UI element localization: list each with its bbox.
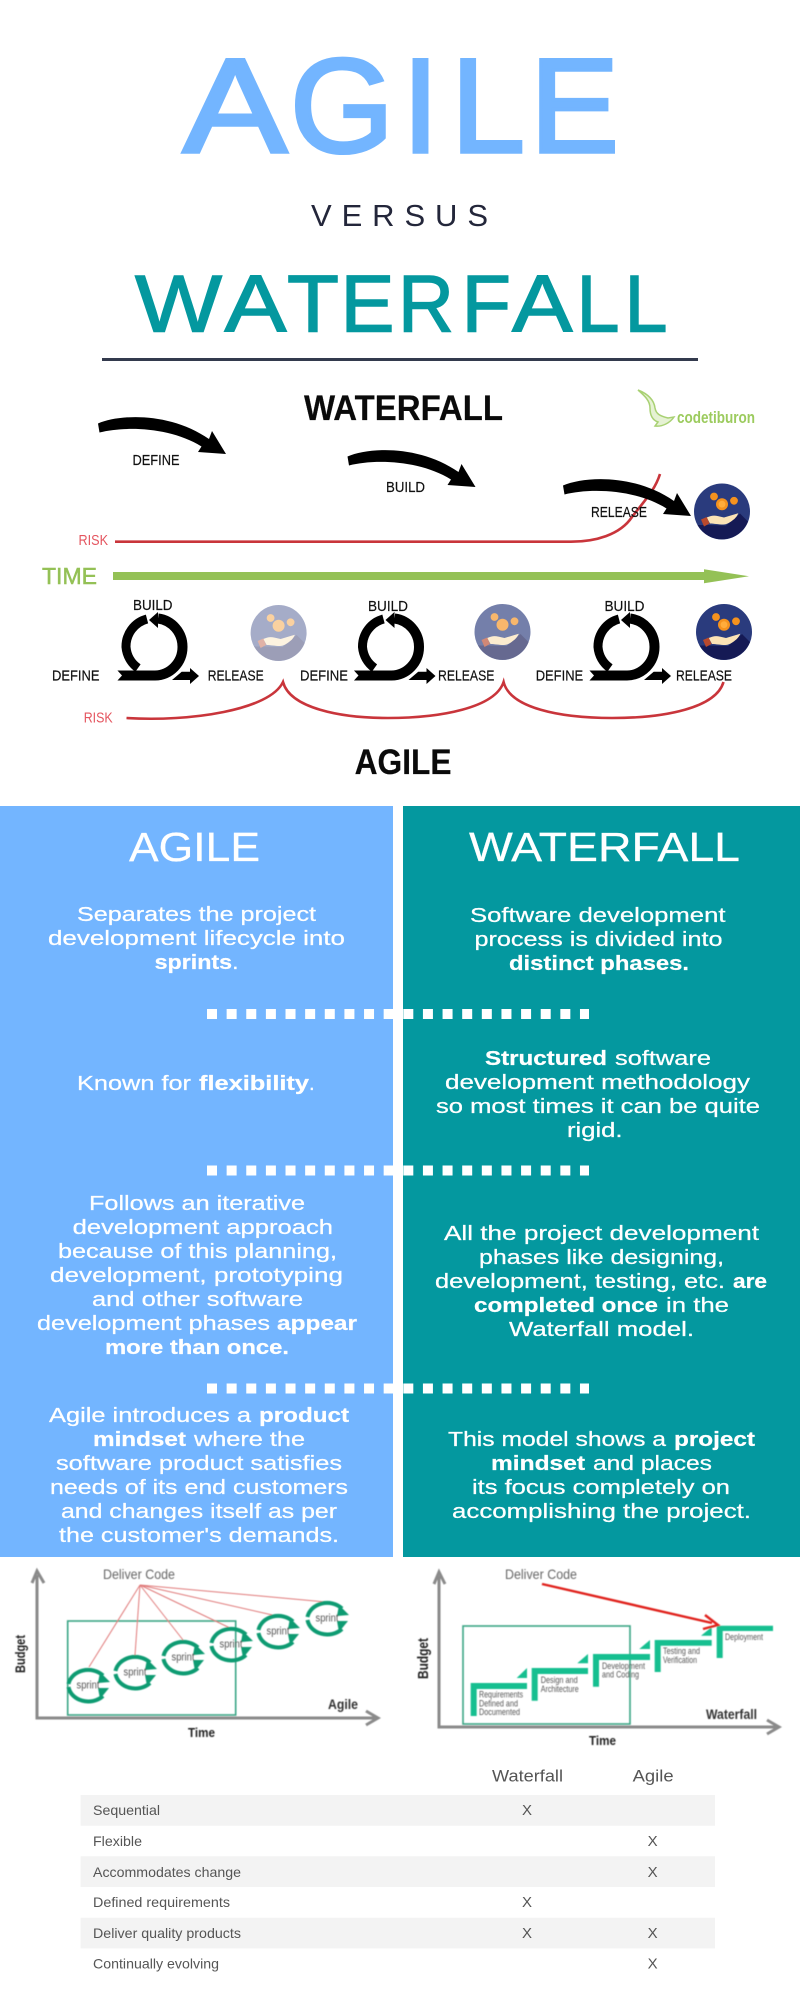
panel: agile column <box>0 806 393 1557</box>
heading: VERSUS: VERSUS <box>311 198 488 233</box>
text: completed once: All the project development <box>444 1222 759 1245</box>
text: flexibility: . <box>309 1072 315 1095</box>
label: deliver code: Deliver Code <box>103 1566 175 1582</box>
dotted divider rows <box>207 1014 589 1388</box>
sprint 1: sprint <box>76 1680 100 1692</box>
row: accommodates change: Accommodates change <box>93 1864 241 1880</box>
heading: WATERFALL: L <box>576 260 620 350</box>
text: iterative approach: appear <box>277 1312 357 1335</box>
sprint 3: sprint <box>172 1652 194 1664</box>
text: sprints: sprints . <box>155 951 239 974</box>
text: project mindset: This model shows a <box>448 1428 667 1451</box>
text: flexibility <box>77 1072 315 1095</box>
row: deliver quality products: Deliver quality products <box>93 1925 241 1941</box>
sprint 5: sprint <box>266 1626 290 1638</box>
text: product mindset <box>49 1404 349 1547</box>
text: product mindset: product <box>259 1404 349 1427</box>
label: build: BUILD <box>133 597 173 614</box>
chart label: waterfall: Waterfall <box>706 1707 757 1722</box>
risk curve: waterfall: RISK <box>78 532 108 549</box>
icon: hand with coins <box>696 604 752 660</box>
row: continually evolving: Continually evolving <box>93 1956 219 1972</box>
text: product mindset: and changes itself as per <box>61 1500 337 1523</box>
label: build: BUILD <box>368 598 408 615</box>
step labels: Requirements <box>479 1690 523 1701</box>
arrow: time: TIME <box>42 563 97 589</box>
agile cycle 2 <box>300 598 530 685</box>
title: AGILE versus WATERFALL <box>102 32 698 361</box>
sprint 3 <box>164 1642 205 1673</box>
text: structured methodology: so most times it can be quite <box>436 1095 760 1118</box>
step labels: Architecture <box>541 1684 579 1695</box>
text: sprints: Separates the project <box>77 903 316 926</box>
step labels: Documented <box>479 1707 520 1718</box>
table header <box>492 1767 674 1786</box>
panel heading: WATERFALL: WATERFALL <box>469 824 740 870</box>
text: completed once: Waterfall model. <box>509 1318 694 1341</box>
row: continually evolving <box>93 1956 658 1973</box>
chart label: agile: Agile <box>328 1697 358 1712</box>
risk curve: agile <box>84 682 723 727</box>
text: structured methodology: software <box>615 1047 711 1070</box>
text: product mindset: Agile introduces a <box>49 1404 252 1427</box>
sprint 1 <box>68 1670 110 1701</box>
axes <box>32 1571 378 1725</box>
text: product mindset: software product satisfies <box>56 1452 342 1475</box>
heading: WATERFALL: T <box>287 260 339 350</box>
row: continually evolving: X <box>648 1956 658 1973</box>
axis label: budget: Budget <box>12 1635 28 1673</box>
heading: WATERFALL: F <box>462 260 511 350</box>
step labels: Verification <box>663 1655 697 1666</box>
row: flexible: Flexible <box>93 1833 142 1849</box>
row: sequential: Sequential <box>93 1802 160 1818</box>
panel: waterfall column <box>403 806 800 1557</box>
text: distinct phases: process is divided into <box>474 928 722 951</box>
table header: Agile <box>633 1767 674 1786</box>
panel heading: AGILE: AGILE <box>129 824 260 870</box>
text: project mindset: its focus completely on <box>472 1476 730 1499</box>
icon: sprint loop <box>589 612 671 684</box>
row: defined requirements: Defined requirements <box>93 1894 230 1910</box>
text: completed once: are <box>733 1270 767 1293</box>
icon: sprint loop <box>354 612 436 684</box>
label: release: RELEASE <box>208 668 264 685</box>
heading: AGILE: G <box>290 32 394 181</box>
text: iterative approach: Follows an iterative <box>89 1192 305 1215</box>
row: deliver quality products <box>81 1918 715 1948</box>
sprint 5 <box>258 1616 300 1647</box>
arrow: define <box>98 417 226 454</box>
row: accommodates change: X <box>648 1864 658 1881</box>
text: completed once: in the <box>666 1294 729 1317</box>
row: deliver quality products: X <box>648 1925 658 1942</box>
heading: AGILE: L <box>451 32 525 181</box>
label: define: DEFINE <box>300 668 348 685</box>
sprint 2: sprint <box>124 1666 146 1678</box>
label: release: RELEASE <box>438 668 494 685</box>
diagram: waterfall versus agile timeline <box>42 389 755 782</box>
text: distinct phases: Software development <box>470 904 726 927</box>
label: deliver code: Deliver Code <box>505 1566 577 1582</box>
sprint 6: sprint <box>316 1612 338 1624</box>
text: completed once: development, testing, etc. <box>435 1270 725 1293</box>
axes <box>434 1572 779 1734</box>
text: iterative approach: more than once. <box>105 1336 289 1359</box>
text: iterative approach: and other software <box>92 1288 303 1311</box>
text: iterative approach <box>37 1192 357 1359</box>
label: define: DEFINE <box>132 452 180 469</box>
row: defined requirements: X <box>522 1894 532 1911</box>
heading: WATERFALL: E <box>340 260 394 350</box>
text: sprints <box>48 903 345 974</box>
label: build: BUILD <box>604 598 645 615</box>
chart: agile budget over time <box>12 1566 378 1740</box>
axis label: budget: Budget <box>416 1638 432 1679</box>
icon: hand with coins, faded <box>251 605 307 661</box>
axis label: time: Time <box>589 1733 616 1748</box>
text: flexibility: flexibility <box>199 1072 310 1095</box>
icon: hand with coins, semi-faded <box>474 604 530 660</box>
text: structured methodology: development methodology <box>445 1071 751 1094</box>
row: flexible <box>93 1833 658 1850</box>
label: build: BUILD <box>386 479 425 496</box>
text: iterative approach: development, prototyping <box>50 1264 343 1287</box>
text: product mindset: mindset <box>93 1428 186 1451</box>
heading: WATERFALL: W <box>135 260 223 350</box>
heading: WATERFALL <box>135 260 668 350</box>
text: completed once: phases like designing, <box>479 1246 724 1269</box>
text: completed once: completed once <box>474 1294 658 1317</box>
risk curve: agile: RISK <box>84 710 113 727</box>
label: release: RELEASE <box>676 668 732 685</box>
table header: Waterfall <box>492 1767 563 1786</box>
label: define: DEFINE <box>536 668 583 685</box>
row: accommodates change <box>81 1856 715 1887</box>
arrow: time <box>42 563 749 589</box>
arrow: release <box>563 479 691 516</box>
text: structured methodology <box>436 1047 760 1142</box>
text: product mindset: needs of its end customers <box>50 1476 348 1499</box>
step labels <box>479 1632 763 1718</box>
heading: AGILE: I <box>402 32 439 181</box>
row: sequential: X <box>522 1802 532 1819</box>
text: structured methodology: Structured <box>485 1047 607 1070</box>
step labels: Development <box>602 1661 645 1672</box>
sprint 6 <box>308 1603 349 1634</box>
icon: hand with coins (waterfall release) <box>694 484 750 540</box>
sprint 2 <box>116 1657 157 1688</box>
table: comparison <box>81 1767 715 1973</box>
step labels: Testing and <box>663 1646 700 1657</box>
heading: AGILE <box>183 32 619 181</box>
text: iterative approach: development approach <box>73 1216 333 1239</box>
text: project mindset: mindset <box>491 1452 585 1475</box>
title rule <box>102 358 698 361</box>
budget box <box>463 1626 630 1724</box>
text: project mindset <box>448 1428 755 1523</box>
axis label: time: Time <box>188 1725 215 1740</box>
text: structured methodology: rigid. <box>567 1119 622 1142</box>
label: release: RELEASE <box>591 504 647 521</box>
heading: AGILE: A <box>183 32 288 181</box>
diagram heading: WATERFALL: WATERFALL <box>304 389 503 428</box>
text: distinct phases <box>470 904 726 975</box>
heading: WATERFALL: L <box>624 260 668 350</box>
chart: waterfall budget over time <box>416 1566 779 1748</box>
steps <box>471 1626 773 1716</box>
deliver lines <box>89 1585 326 1667</box>
text: completed once <box>435 1222 767 1341</box>
heading: AGILE: E <box>530 32 619 181</box>
row: deliver quality products: X <box>522 1925 532 1942</box>
risk curve: waterfall <box>78 474 660 549</box>
logo: codetiburon <box>638 390 755 427</box>
heading: WATERFALL: A <box>512 260 572 350</box>
text: product mindset: the customer's demands. <box>59 1524 339 1547</box>
arrow: build <box>348 450 476 487</box>
diagram heading: AGILE: AGILE <box>355 743 452 782</box>
sprint 4 <box>212 1629 253 1660</box>
sprint 4: sprint <box>220 1638 242 1650</box>
agile cycle 3 <box>536 598 752 685</box>
text: distinct phases: distinct phases. <box>509 952 689 975</box>
step labels: Defined and <box>479 1699 518 1710</box>
logo: codetiburon: codetiburon <box>677 408 755 427</box>
text: sprints: development lifecycle into <box>48 927 345 950</box>
step labels: Design and <box>541 1675 578 1686</box>
text: iterative approach: development phases <box>37 1312 270 1335</box>
text: project mindset: and places <box>593 1452 712 1475</box>
icon: sprint loop <box>117 612 199 684</box>
text: iterative approach: because of this planning, <box>58 1240 337 1263</box>
budget box <box>68 1621 236 1715</box>
row: defined requirements <box>93 1894 532 1911</box>
row: flexible: X <box>648 1833 658 1850</box>
heading: WATERFALL: R <box>398 260 454 350</box>
text: product mindset: where the <box>193 1428 305 1451</box>
text: flexibility: Known for <box>77 1072 191 1095</box>
agile cycle 1 <box>52 597 307 685</box>
step labels: Deployment <box>725 1632 763 1643</box>
heading: WATERFALL: A <box>224 260 286 350</box>
label: define: DEFINE <box>52 668 100 685</box>
step labels: and Coding <box>602 1670 639 1681</box>
arrow: deliver code <box>542 1584 718 1629</box>
row: sequential <box>81 1795 715 1826</box>
text: project mindset: accomplishing the project. <box>452 1500 751 1523</box>
text: project mindset: project <box>674 1428 755 1451</box>
